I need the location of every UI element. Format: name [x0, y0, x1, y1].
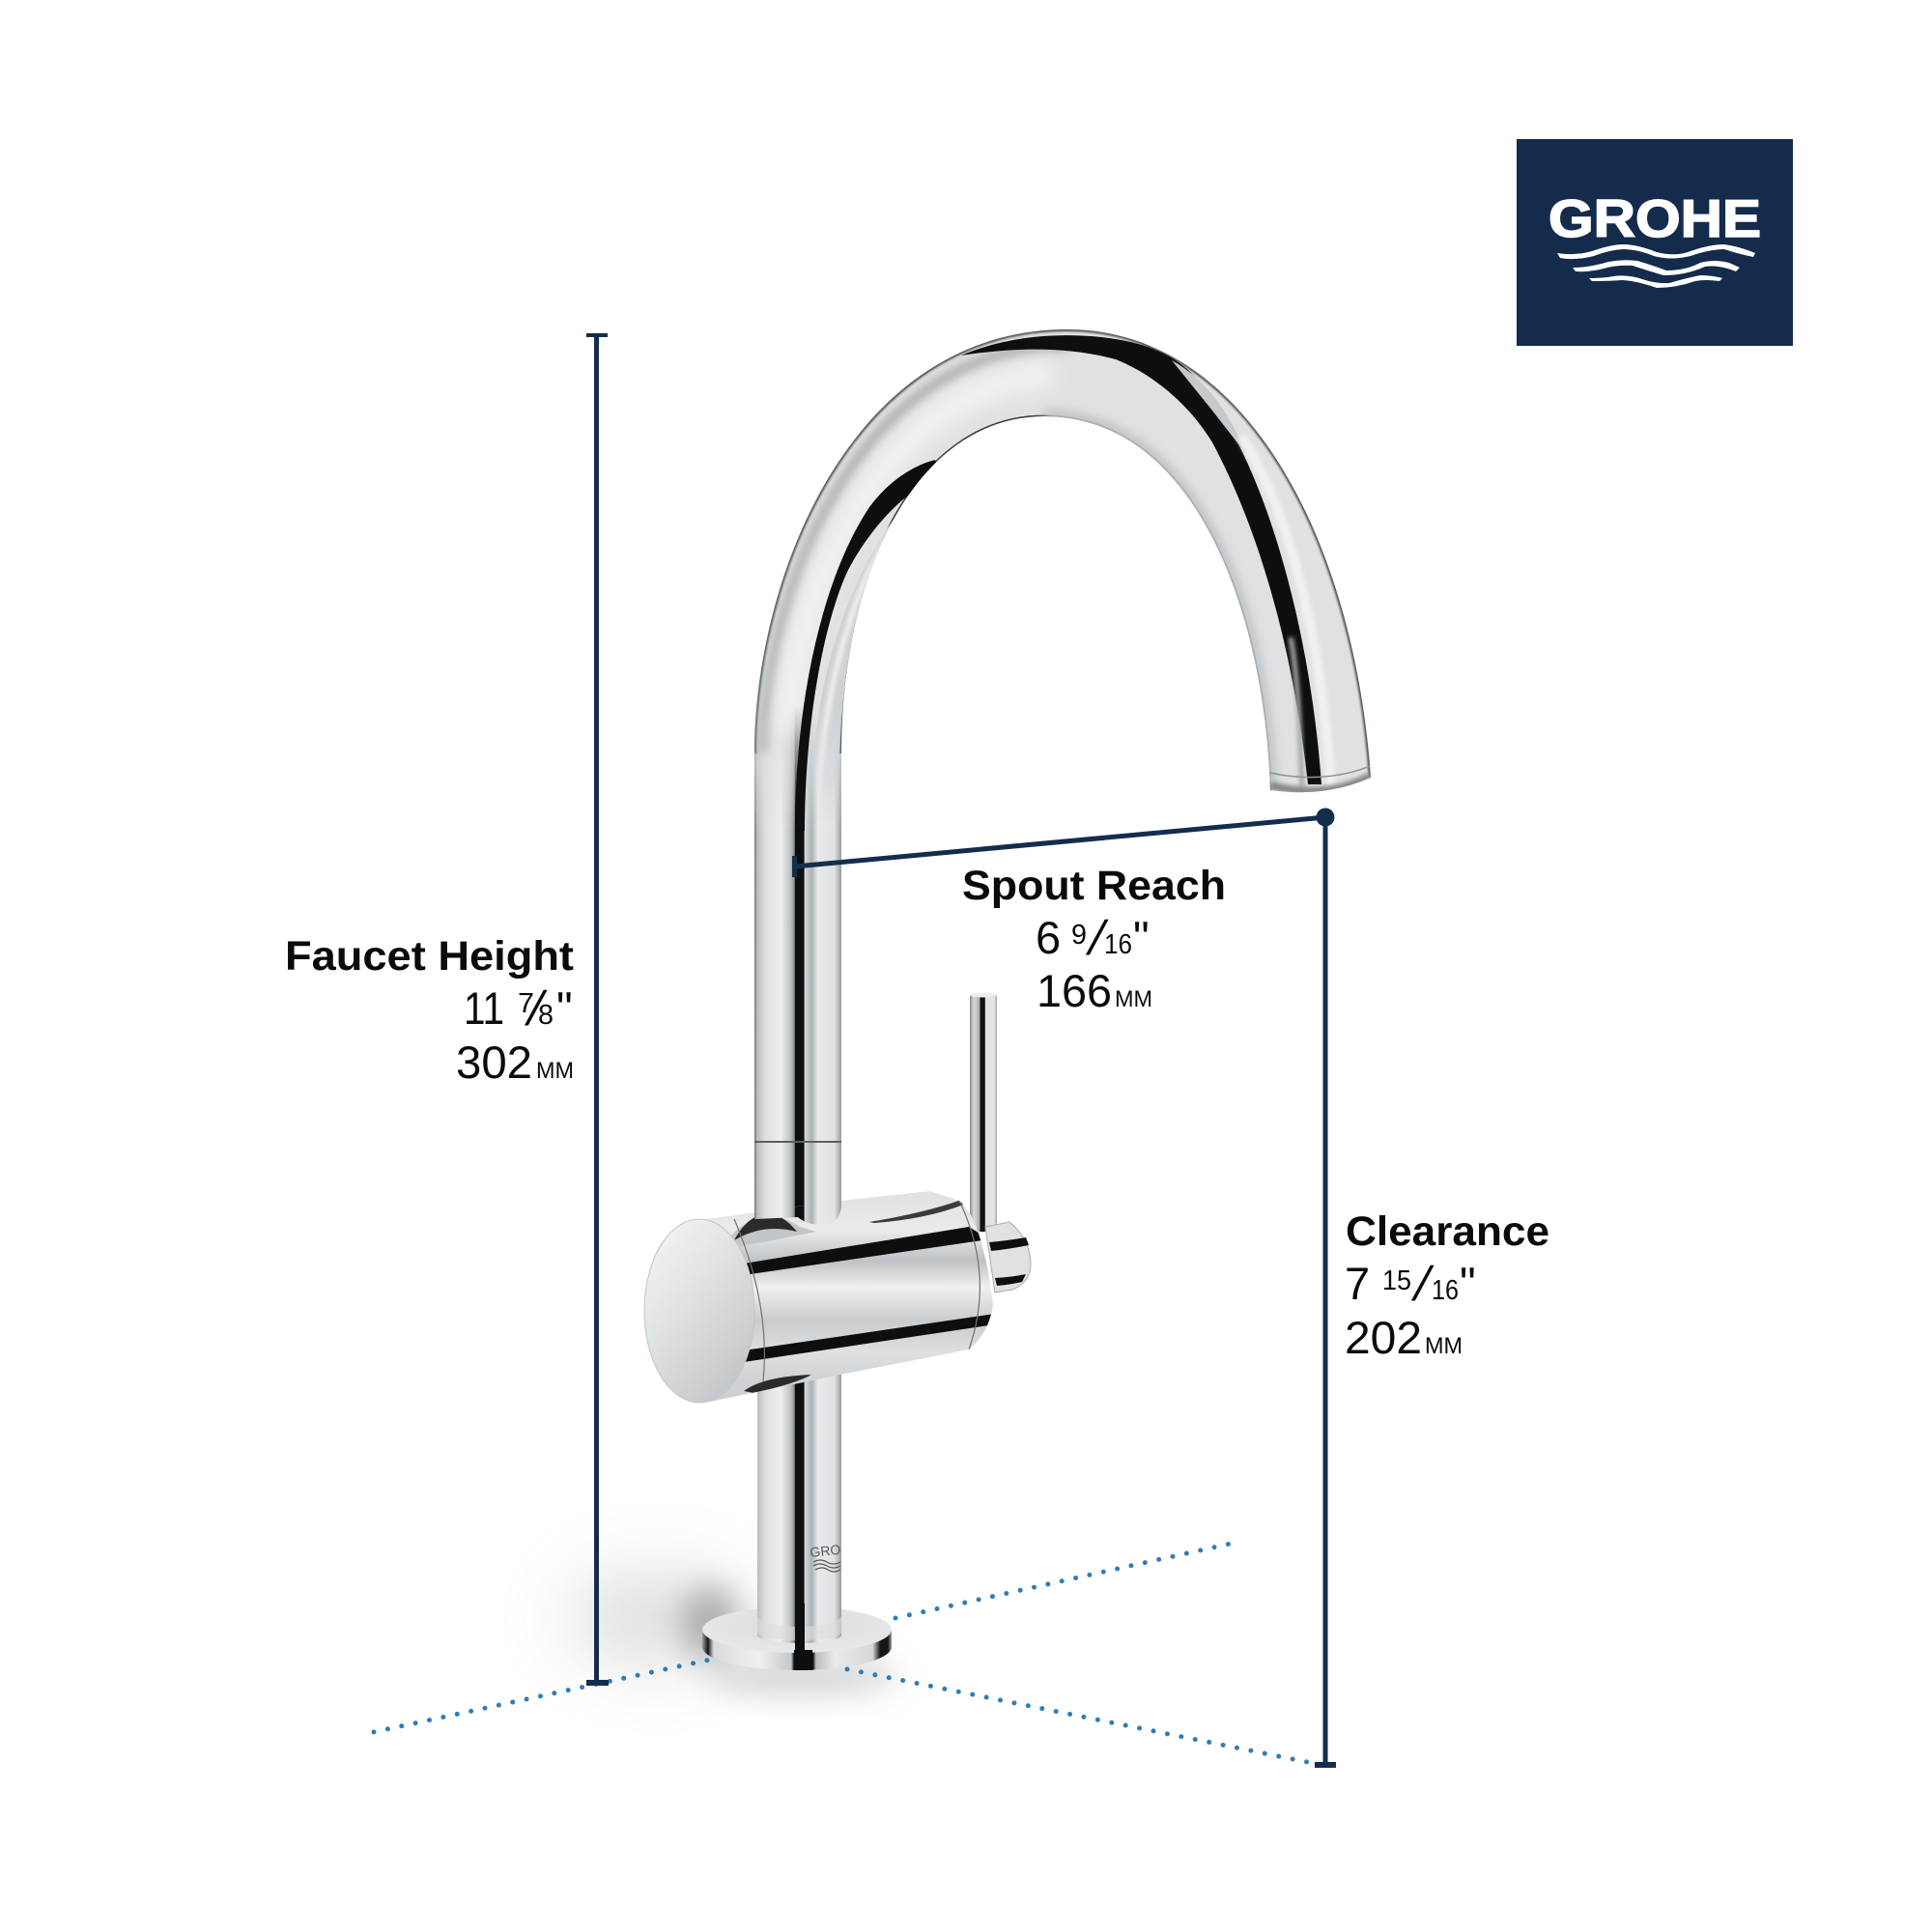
- label: clearance: [1345, 1208, 1549, 1363]
- label: spout reach: 6: [1036, 912, 1061, 963]
- lever handle: [970, 993, 997, 1232]
- stem logo mark: GROHE: [810, 1540, 860, 1560]
- upper band: [744, 1227, 989, 1275]
- label: faucet height: ": [556, 982, 573, 1034]
- knob behind body: [985, 1222, 1031, 1293]
- label: spout reach: Spout Reach: [962, 863, 1226, 909]
- base plate: [702, 1604, 892, 1670]
- label: spout reach: 9: [1071, 920, 1087, 951]
- label: faucet height: [285, 933, 574, 1088]
- logo: GROHE: [1517, 139, 1793, 346]
- label: clearance: Clearance: [1346, 1208, 1549, 1255]
- logo: GROHE: GROHE: [1548, 188, 1761, 248]
- dimension: spout reach line: [792, 817, 1325, 877]
- dark reflection: inside of arch: [795, 460, 938, 831]
- faucet: [638, 309, 1401, 1670]
- label: clearance: /: [1408, 1257, 1437, 1311]
- label: clearance: 7: [1345, 1258, 1370, 1309]
- dimension: faucet height line: [586, 333, 609, 1686]
- lower stem: [757, 1374, 841, 1606]
- dotted floor line: front right: [847, 1669, 1312, 1763]
- label: clearance: ": [1460, 1258, 1476, 1309]
- spout and upper stem: [754, 329, 1371, 1212]
- dark reflection: top of arch: [961, 335, 1321, 784]
- label: faucet height: Faucet Height: [285, 933, 574, 980]
- stem logo mark: [810, 1545, 841, 1573]
- label: clearance: 202: [1345, 1312, 1422, 1363]
- label: faucet height: 7: [518, 988, 534, 1019]
- mixer body: [643, 1191, 993, 1403]
- label: spout reach: 166: [1037, 965, 1112, 1016]
- label: faucet height: /: [522, 981, 551, 1036]
- light sliver inside arch: [815, 520, 894, 769]
- icon: water waves: [1557, 244, 1755, 288]
- label: faucet height: 302: [456, 1037, 532, 1088]
- dimension: clearance line: [1315, 808, 1336, 1768]
- label: spout reach: ": [1133, 912, 1150, 963]
- dotted floor line: back right: [895, 1543, 1235, 1618]
- label: spout reach: /: [1083, 911, 1112, 965]
- floor shadow: [565, 1570, 898, 1695]
- lower band: [744, 1314, 995, 1362]
- label: clearance: 15: [1382, 1265, 1411, 1296]
- label: clearance: 16: [1432, 1275, 1459, 1306]
- label: spout reach: MM: [1115, 986, 1152, 1012]
- label: spout reach: 16: [1104, 929, 1132, 960]
- end cap: [644, 1219, 754, 1403]
- label: faucet height: MM: [536, 1058, 574, 1084]
- label: faucet height: 11: [464, 982, 504, 1034]
- label: spout reach: [962, 863, 1226, 1016]
- dotted floor line: left: [374, 1659, 715, 1732]
- label: clearance: MM: [1425, 1333, 1463, 1359]
- label: faucet height: 8: [538, 1000, 554, 1031]
